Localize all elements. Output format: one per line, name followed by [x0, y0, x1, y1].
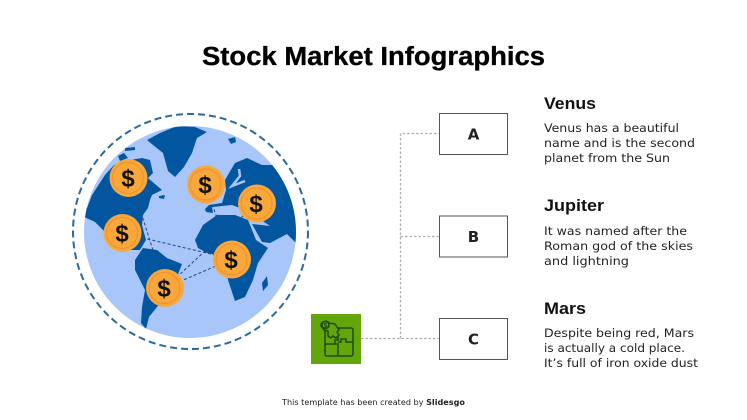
icon: puzzle with dollar — [311, 314, 361, 364]
text block: Jupiter: and lightning — [544, 254, 629, 268]
globe ocean — [84, 126, 296, 338]
text block: Mars: is actually a cold place. — [544, 341, 685, 355]
box C — [440, 318, 508, 360]
coin: North America — [110, 159, 148, 197]
text block: Venus — [544, 95, 695, 165]
footer credit: This template has been created by Slidesgo — [281, 398, 465, 407]
text block: Venus: Venus — [544, 95, 596, 113]
text block: Venus: planet from the Sun — [544, 151, 670, 165]
text block: Venus: name and is the second — [544, 136, 695, 150]
text block: Jupiter: It was named after the — [544, 224, 687, 238]
coin: Eastern Europe: $ — [249, 191, 263, 218]
coin: Africa — [213, 240, 251, 278]
box A: A — [468, 126, 480, 144]
box B — [440, 216, 508, 257]
coin: Western Europe: $ — [198, 172, 212, 199]
text block: Jupiter: Roman god of the skies — [544, 239, 693, 253]
text block: Mars: It’s full of iron oxide dust — [544, 356, 699, 370]
globe illustration — [73, 114, 310, 349]
icon: puzzle with dollar: $ — [324, 322, 328, 330]
text block: Jupiter: Jupiter — [544, 197, 605, 215]
box A — [440, 114, 508, 154]
box B: B — [468, 228, 479, 246]
text block: Mars: Despite being red, Mars — [544, 326, 694, 340]
text block: Mars — [544, 300, 699, 370]
coin: Western Europe — [187, 166, 225, 204]
text block: Venus: Venus has a beautiful — [544, 121, 679, 135]
box C: C — [468, 330, 479, 348]
dashed network lines — [122, 178, 257, 288]
title: Stock Market Infographics — [202, 43, 545, 71]
coin: Africa: $ — [224, 247, 238, 274]
coin: Central America — [104, 214, 142, 252]
dashed ring — [73, 114, 308, 349]
coin: South America — [146, 269, 184, 307]
text block: Jupiter — [544, 197, 693, 268]
coin: Central America: $ — [115, 220, 129, 248]
continents — [80, 126, 310, 329]
connector arrows — [361, 134, 439, 338]
coin: South America: $ — [157, 276, 171, 302]
text block: Mars: Mars — [544, 300, 586, 318]
coin: North America: $ — [121, 166, 135, 192]
coin: Eastern Europe — [238, 184, 276, 222]
